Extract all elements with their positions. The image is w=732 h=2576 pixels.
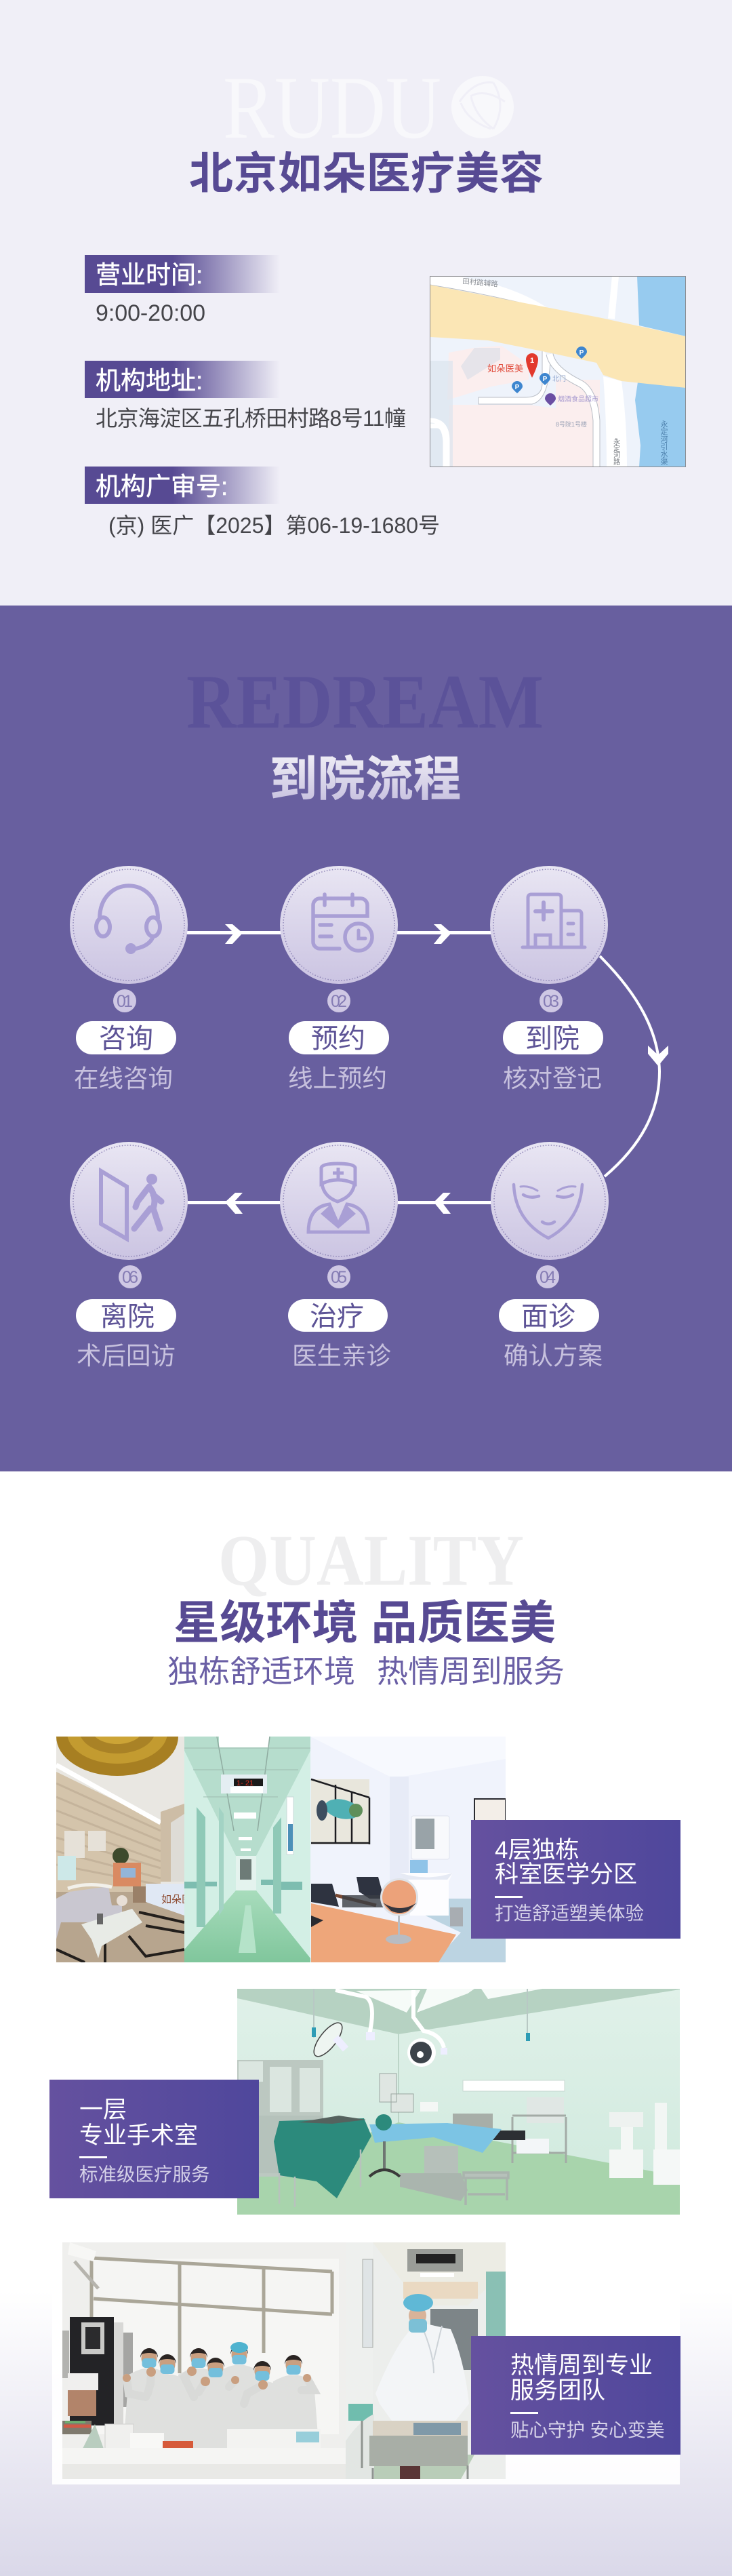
label: ad license — [85, 467, 280, 504]
card: four-floor building — [471, 1820, 680, 1939]
map: 北门 — [552, 374, 566, 383]
step 02 — [280, 866, 398, 1092]
pill: arrival — [503, 1021, 603, 1054]
card: operating theatre: 专业手术室 — [79, 2122, 198, 2149]
step 04 — [491, 1142, 609, 1370]
photo: corridor — [184, 1737, 310, 1962]
text: license number: (京) 医广【2025】第06-19-1680号 — [108, 513, 440, 538]
map: P — [580, 349, 584, 357]
number 01: 01 — [117, 992, 133, 1011]
map: 如朵医美 — [487, 363, 523, 374]
arrow: 01 to 02 — [187, 924, 282, 944]
photo: lobby: 如朵医 — [161, 1894, 192, 1905]
section heading: 到院流程 — [270, 753, 461, 806]
card: four-floor building: 科室医学分区 — [495, 1861, 637, 1888]
number 06: 06 — [122, 1268, 138, 1287]
map: 田村路辅路 — [462, 277, 499, 289]
map: 1 — [530, 357, 534, 365]
card: operating theatre — [49, 2080, 259, 2198]
arrow: 04 to 05 — [397, 1193, 492, 1214]
map: 8号院1号楼 — [556, 420, 587, 428]
card: operating theatre: 标准级医疗服务 — [79, 2164, 210, 2185]
number 05: 05 — [331, 1268, 347, 1287]
section heading: 星级环境 品质医美 — [174, 1598, 556, 1649]
card: operating theatre: 一层 — [79, 2097, 127, 2123]
icon: hospital — [523, 894, 585, 947]
number 03 — [540, 989, 563, 1012]
panel: clinic information — [0, 0, 732, 606]
text: address: 北京海淀区五孔桥田村路8号11幢 — [96, 406, 406, 431]
pill: consult: 咨询 — [99, 1024, 153, 1054]
caption: 在线咨询 — [74, 1065, 173, 1092]
pill: treatment: 治疗 — [310, 1302, 364, 1332]
card: four-floor building: 4层独栋 — [495, 1837, 579, 1863]
photo: consulting room — [310, 1737, 506, 1962]
number 04 — [536, 1265, 559, 1288]
photo: doctor with cart — [346, 2242, 506, 2479]
icon: person leaving through door — [101, 1171, 161, 1239]
map — [430, 276, 686, 467]
number 03: 03 — [543, 992, 559, 1011]
pill: appointment — [289, 1021, 389, 1054]
icon: headset — [96, 886, 160, 952]
icon: doctor — [308, 1164, 368, 1232]
section subheading: 热情周到服务 — [377, 1654, 565, 1689]
caption: 术后回访 — [77, 1342, 176, 1370]
step 05 — [280, 1142, 398, 1370]
map: P — [543, 376, 548, 383]
card: service team — [471, 2336, 680, 2455]
caption: 医生亲诊 — [292, 1342, 391, 1370]
map: P — [515, 384, 520, 391]
pill: arrival: 到院 — [525, 1024, 580, 1054]
pill: consult — [76, 1021, 176, 1054]
pill: appointment: 预约 — [311, 1024, 365, 1054]
label: address — [85, 361, 280, 398]
pill: discharge — [76, 1299, 176, 1332]
pill: face consultation — [499, 1299, 599, 1332]
section subheading: 独栋舒适环境 — [167, 1654, 355, 1689]
title: 北京如朵医疗美容 — [189, 148, 544, 198]
icon: calendar and clock — [313, 894, 372, 951]
photo: operating room — [237, 1989, 680, 2215]
label: address: 机构地址: — [96, 367, 203, 395]
panel: visit process — [0, 606, 732, 1471]
pill: face consultation: 面诊 — [521, 1302, 575, 1332]
card: four-floor building: 打造舒适塑美体验 — [495, 1903, 644, 1924]
number 04: 04 — [540, 1268, 556, 1287]
caption: 线上预约 — [288, 1065, 387, 1092]
map: 烟酒食品超市 — [558, 395, 598, 403]
photo: nursing team — [62, 2242, 346, 2479]
number 05 — [327, 1265, 350, 1288]
map: 永定河路 — [611, 437, 619, 466]
label: business hours — [85, 255, 280, 293]
arrow: 02 to 03 — [397, 924, 492, 944]
arrow: 03 curving down to 04 — [600, 956, 668, 1176]
number 01 — [113, 989, 136, 1012]
photo: lobby — [56, 1737, 184, 1962]
label: ad license: 机构广审号: — [96, 473, 228, 500]
label: business hours: 营业时间: — [96, 261, 203, 289]
number 02: 02 — [331, 992, 347, 1011]
number 02 — [327, 989, 350, 1012]
text: hours: 9:00-20:00 — [96, 300, 205, 326]
arrow: 05 to 06 — [187, 1193, 282, 1214]
watermark logo: RUDU with rose: RUDU — [223, 58, 441, 157]
card: service team: 贴心守护 安心变美 — [510, 2419, 665, 2440]
watermark word: QUALITY — [218, 1521, 524, 1601]
number 06 — [119, 1265, 142, 1288]
section subheading — [167, 1654, 565, 1689]
icon: face — [514, 1185, 582, 1238]
map: 永定河引水渠 — [659, 420, 668, 466]
panel: environment and quality — [0, 1471, 732, 2576]
pill: treatment — [288, 1299, 388, 1332]
pill: discharge: 离院 — [100, 1302, 155, 1332]
step 06 — [70, 1142, 188, 1370]
card: service team: 服务团队 — [510, 2377, 605, 2404]
step 01 — [70, 866, 188, 1092]
map border — [430, 277, 686, 467]
photo: corridor: 1- 21 — [237, 1779, 253, 1787]
caption: 确认方案 — [504, 1342, 603, 1370]
step 03 — [490, 866, 608, 1092]
watermark word: REDREAM — [186, 660, 544, 745]
caption: 核对登记 — [503, 1065, 602, 1092]
card: service team: 热情周到专业 — [510, 2352, 653, 2379]
